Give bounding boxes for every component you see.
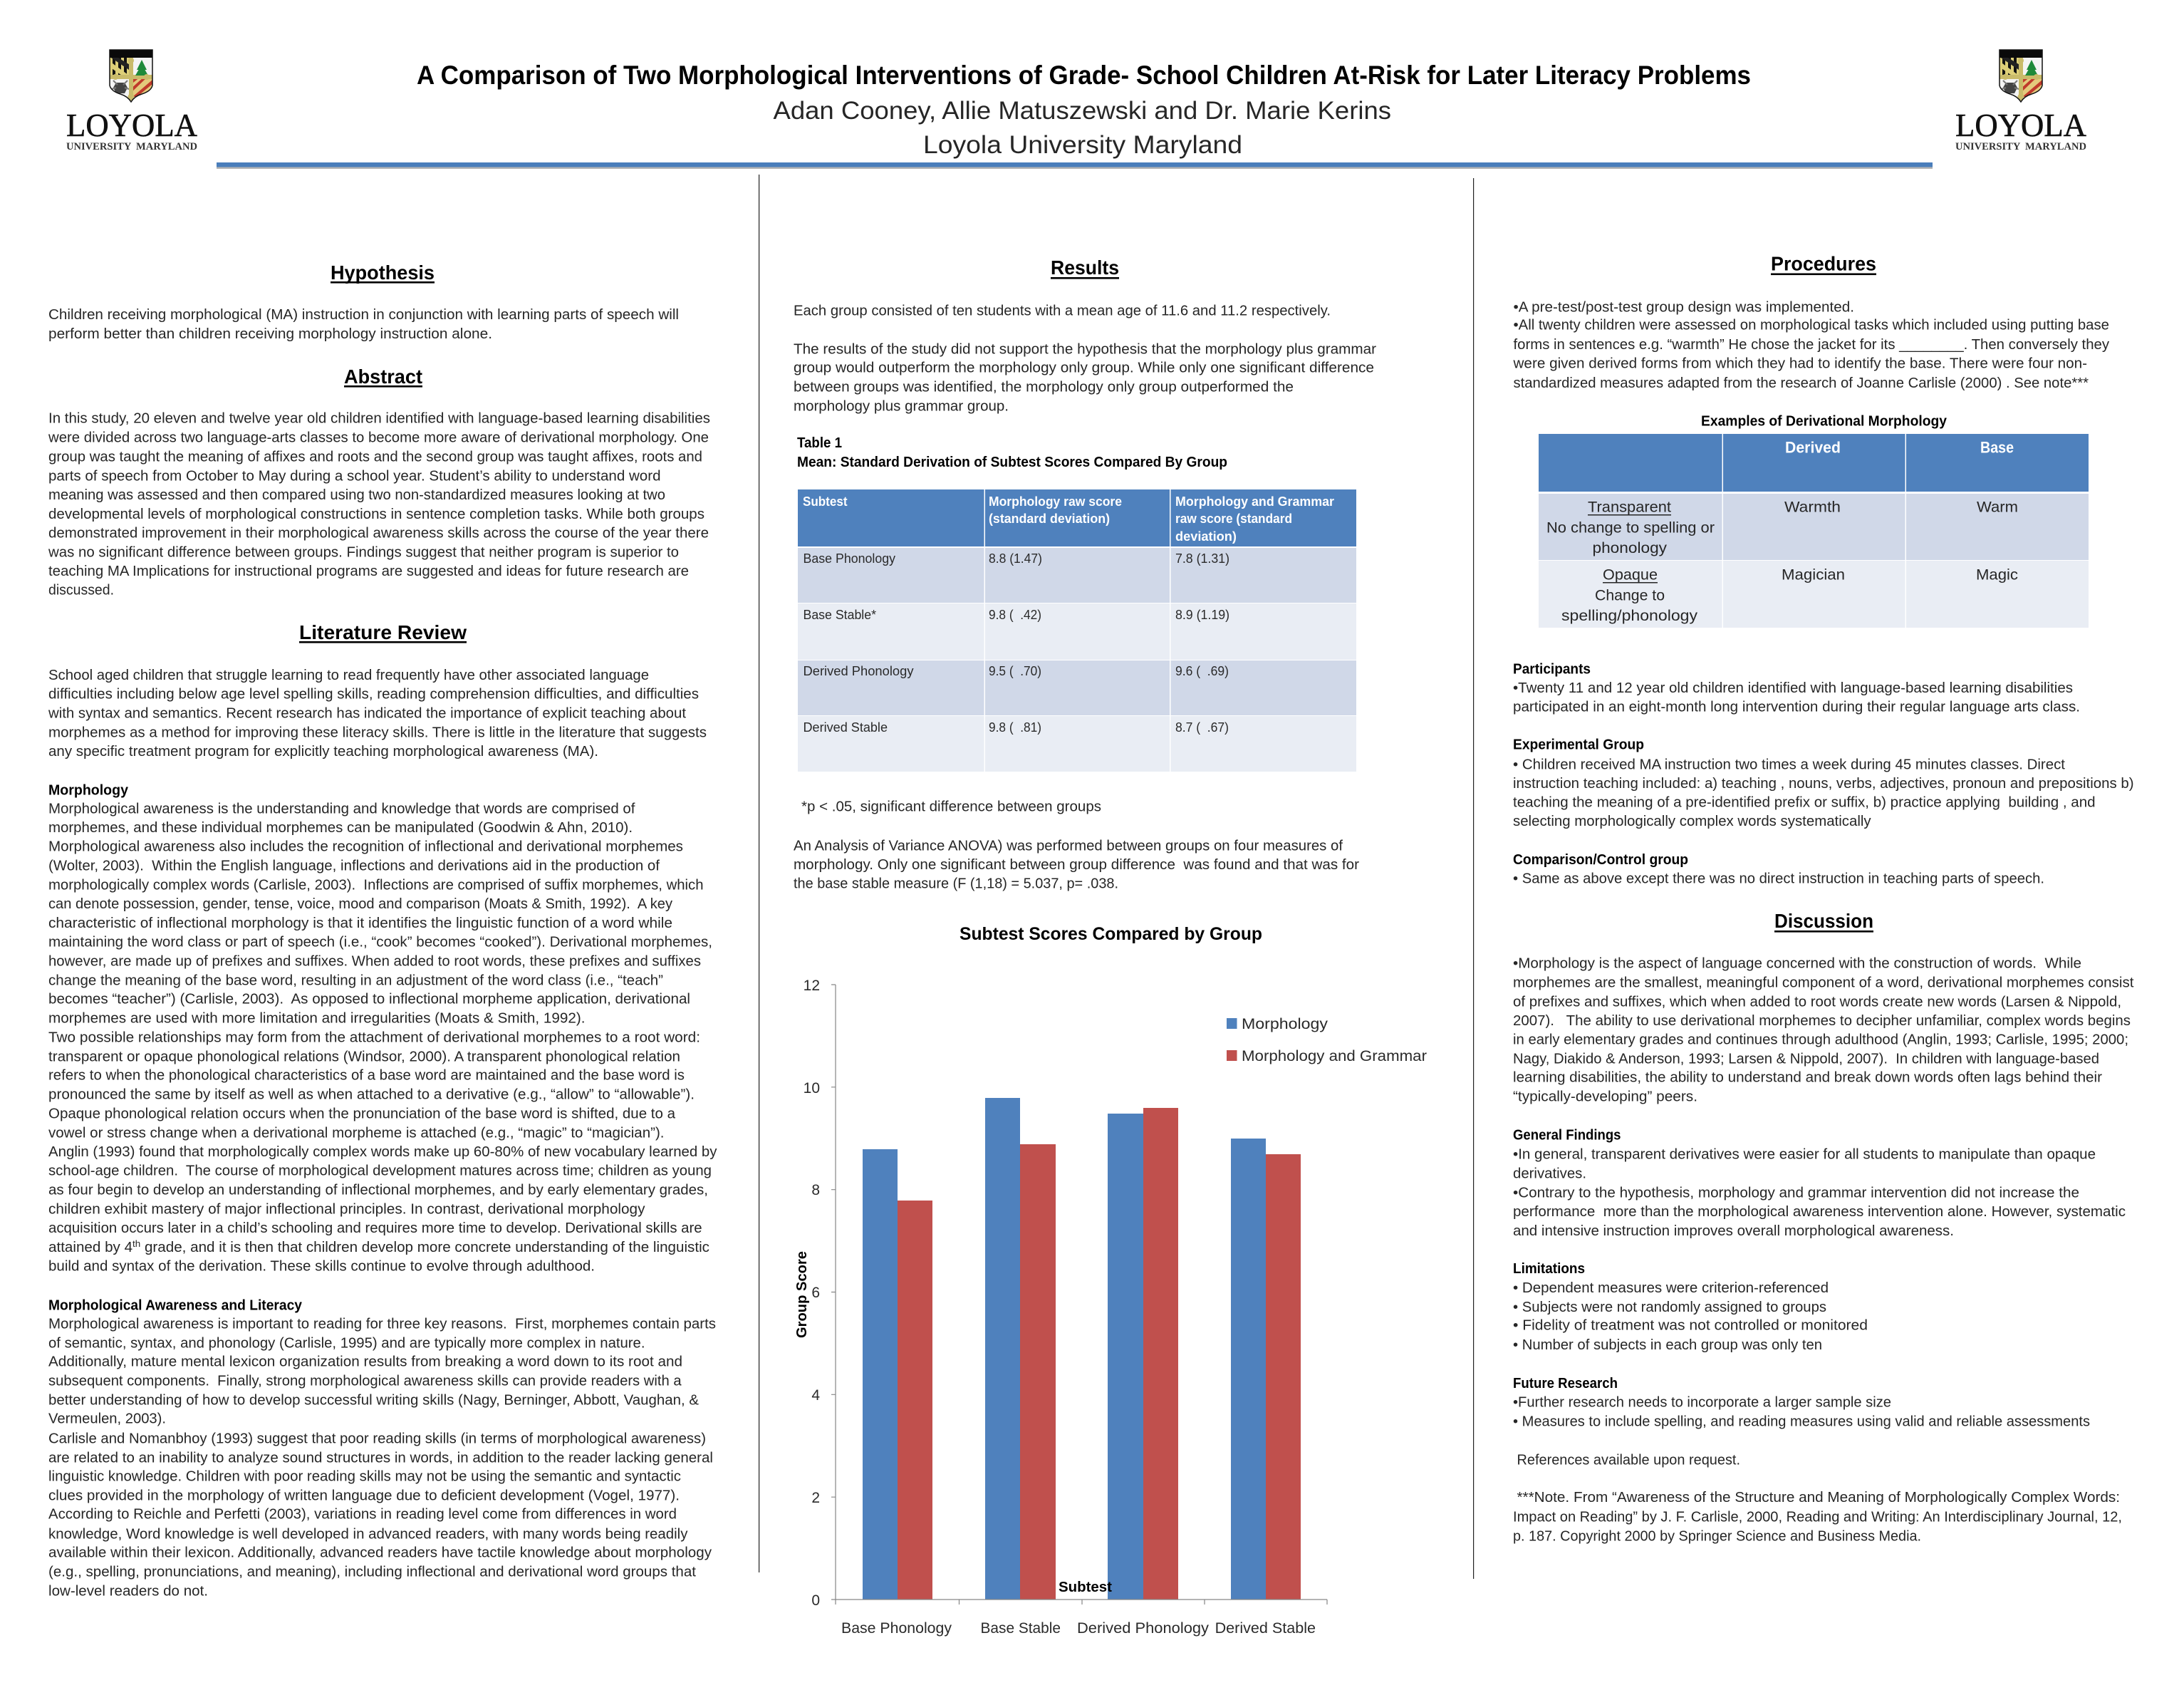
table: subtest scores: Derived Phonology <box>804 664 913 678</box>
table: subtest scores: deviation) <box>1175 529 1237 544</box>
text block: general findings: •Contrary to the hypothesis, morphology and grammar intervention did not increase the <box>1513 1186 2079 1201</box>
legend: Morphology and Grammar <box>1242 1048 1427 1064</box>
text block: morphology: change the meaning of the base word, resulting in an adjustment of the word class (i.e., “teach” <box>48 973 663 989</box>
text block: abstract: were divided across two language-arts classes to become more aware of derivational morphology. One <box>48 430 709 446</box>
text block: abstract: parts of speech from October to May during a school year. Student’s ability to understand word <box>48 469 661 484</box>
text block: morphology: grade, and it is then that children develop more concrete understanding of the linguistic <box>140 1240 709 1255</box>
text block: abstract: was no significant difference between groups. Findings suggest that neither program is superior to <box>48 544 679 560</box>
text block: note: ***Note. From “Awareness of the Structure and Meaning of Morphologically Complex Words: <box>1517 1490 2120 1505</box>
table: subtest scores: 8.8 (1.47) <box>989 551 1042 566</box>
table: subtest scores: 8.7 ( .67) <box>1175 720 1229 735</box>
text block: awareness and literacy: subsequent components. Finally, strong morphological awareness skills can provide readers with a <box>48 1374 682 1389</box>
text block: procedures: •A pre-test/post-test group design was implemented. <box>1513 299 1854 315</box>
table: derivational morphology: Warm <box>1977 499 2018 516</box>
heading: Abstract: Abstract <box>344 366 422 388</box>
text block: morphology: Opaque phonological relation occurs when the pronunciation of the base word is shifted, due to a <box>48 1106 676 1121</box>
footnote: *p < .05, significant difference between groups <box>801 799 1101 815</box>
text block: awareness and literacy: (e.g., spelling, pronunciations, and meaning), including inflectional and derivational word groups that <box>48 1565 696 1580</box>
x axis labels: Base Stable <box>980 1620 1061 1637</box>
y axis labels: 4 <box>811 1387 820 1404</box>
x axis labels: Derived Phonology <box>1077 1620 1210 1637</box>
text block: morphology: morphemes are used with more limitation and irregularities (Moats & Smith, 1992). <box>48 1010 585 1026</box>
text block: experimental group <box>1513 757 2134 829</box>
text block: procedures <box>1512 299 2109 391</box>
text block: awareness and literacy <box>48 1317 716 1599</box>
text block: awareness and literacy: Vermeulen, 2003). <box>48 1411 166 1426</box>
text block: awareness and literacy: Carlisle and Nomanbhoy (1993) suggest that poor reading skills (in terms of morphological awareness) <box>48 1431 706 1446</box>
table: derivational morphology: Base <box>1980 439 2014 456</box>
text block: ANOVA: An Analysis of Variance ANOVA) was performed between groups on four measures of <box>794 838 1343 854</box>
text block: morphology: as four begin to develop an understanding of inflectional morphemes, and by early elementary grades, <box>48 1183 708 1198</box>
text block: results: group would outperform the morphology only group. While only one significant difference <box>794 361 1374 376</box>
table: derivational morphology: No change to spelling or <box>1546 519 1715 536</box>
text block: note: Impact on Reading” by J. F. Carlisle, 2000, Reading and Writing: An Interdisciplinary Journal, 12, <box>1513 1509 2122 1525</box>
table: subtest scores: Base Phonology <box>804 551 895 566</box>
text block: general findings: •In general, transparent derivatives were easier for all students to manipulate than opaque <box>1513 1147 2096 1163</box>
text block: results: morphology plus grammar group. <box>794 399 1009 415</box>
text block: discussion: “typically-developing” peers. <box>1513 1089 1697 1104</box>
text block: general findings: and intensive instruction improves overall morphological awareness. <box>1513 1223 1954 1239</box>
subheading: General Findings: General Findings <box>1513 1127 1621 1143</box>
table caption: derivational morphology: Examples of Derivational Morphology <box>1701 413 1948 429</box>
text block: morphology: morphemes, and these individual morphemes can be manipulated (Goodwin & Ahn, 2010). <box>48 820 633 836</box>
logo: Loyola right <box>1955 50 2086 152</box>
text block: discussion: of prefixes and suffixes, which when added to root words create new words (Larsen & Nippold, <box>1513 995 2121 1010</box>
heading: Results: Results <box>1051 256 1119 279</box>
text block: discussion: learning disabilities, the ability to understand and break down words often lags behind their <box>1513 1070 2102 1086</box>
axes <box>831 985 1327 1605</box>
table: subtest scores: 9.5 ( .70) <box>989 664 1041 678</box>
table: subtest scores: 9.8 ( .81) <box>989 720 1041 735</box>
table: subtest scores: Base Stable* <box>804 608 876 622</box>
text block: awareness and literacy: clues provided in the morphology of written language due to deficient development (Vogel, 1977). <box>48 1488 680 1503</box>
text block: results <box>794 304 1376 415</box>
text block: morphology: becomes “teacher”) (Carlisle, 2003). As opposed to inflectional morpheme application, derivational <box>48 992 690 1007</box>
table: derivational morphology: Transparent <box>1588 499 1671 516</box>
text block: abstract: developmental levels of morphological constructions in sentence completion tasks. While both groups <box>48 507 704 522</box>
text block: future research: •Further research needs to incorporate a larger sample size <box>1513 1395 1891 1411</box>
text block: limitations <box>1513 1280 1868 1353</box>
table caption <box>797 435 1227 470</box>
text block: limitations: • Fidelity of treatment was not controlled or monitored <box>1513 1318 1868 1334</box>
text block: morphology: attained by 4 <box>48 1240 130 1255</box>
logo: Loyola left <box>66 50 197 152</box>
text block: experimental group: instruction teaching included: a) teaching , nouns, verbs, adjectives, pronoun and prepositions b) <box>1513 776 2134 792</box>
text block: morphology: however, are made up of prefixes and suffixes. When added to root words, these prefixes and suffixes <box>48 953 701 969</box>
y axis labels: 2 <box>811 1490 820 1506</box>
heading: Procedures: Procedures <box>1771 252 1876 275</box>
text block: discussion: in early elementary grades and continues through adulthood (Anglin, 1993; Carlisle, 1995; 2000; <box>1513 1032 2128 1047</box>
text block: literature intro <box>48 668 707 760</box>
text block: morphology: (Wolter, 2003). Within the English language, inflections and derivations aid in the production of <box>48 858 660 873</box>
bars: Derived Stable <box>1231 1139 1301 1600</box>
text block: morphology: th <box>132 1238 140 1249</box>
bars: Derived Phonology <box>1108 1108 1178 1600</box>
text block: ANOVA <box>794 838 1359 892</box>
text block: awareness and literacy: Morphological awareness is important to reading for three key reasons. First, morphemes contain parts <box>48 1317 716 1332</box>
table: subtest scores: raw score (standard <box>1175 512 1292 526</box>
text block: awareness and literacy: linguistic knowledge. Children with poor reading skills may not be using the semantic and syntactic <box>48 1469 681 1485</box>
text block: morphology: transparent or opaque phonological relations (Windsor, 2000). A transparent phonological relation <box>48 1049 680 1064</box>
y axis labels: 10 <box>804 1080 820 1097</box>
table: subtest scores: Derived Stable <box>804 720 888 735</box>
text block: morphology: morphologically complex words (Carlisle, 2003). Inflections are comprised of suffix morphemes, which <box>48 878 704 893</box>
text block: awareness and literacy: available within their lexicon. Additionally, advanced readers have tactile knowledge about morphology <box>48 1545 712 1560</box>
legend: Morphology <box>1242 1016 1328 1032</box>
text block: awareness and literacy: According to Reichle and Perfetti (2003), variations in reading level come from differences in word <box>48 1506 677 1522</box>
text block: literature intro: difficulties including below age level spelling skills, reading comprehension difficulties, and difficulties <box>48 687 699 703</box>
text block: morphology: acquisition occurs later in a child’s schooling and requires more time to develop. Derivational skills are <box>48 1220 702 1236</box>
bars: Base Stable <box>985 1098 1056 1600</box>
text block: morphology: Morphological awareness is the understanding and knowledge that words are comprised of <box>48 801 635 817</box>
text block: morphology: Two possible relationships may form from the attachment of derivational morphemes to a root word: <box>48 1030 700 1046</box>
y axis labels: 6 <box>811 1285 820 1301</box>
table: subtest scores: Morphology and Grammar <box>1175 494 1334 509</box>
text block: morphology <box>48 801 717 1274</box>
panel: middle column <box>794 256 1427 1637</box>
text block: abstract: teaching MA Implications for instructional programs are suggested and ideas for future research are <box>48 564 689 579</box>
table caption: Mean: Standard Derivation of Subtest Scores Compared By Group <box>797 455 1227 470</box>
table: derivational morphology: Magic <box>1976 566 2018 583</box>
x axis labels: Derived Stable <box>1215 1620 1316 1637</box>
text block: future research <box>1513 1395 2090 1429</box>
text block: note: p. 187. Copyright 2000 by Springer Science and Business Media. <box>1513 1529 1921 1545</box>
text block: ANOVA: the base stable measure (F (1,18) = 5.037, p= .038. <box>794 876 1118 892</box>
subheading: Morphology: Morphology <box>48 782 129 798</box>
text block: discussion: 2007). The ability to use derivational morphemes to decipher unfamiliar, complex words begins <box>1513 1013 2131 1029</box>
text block: limitations: • Number of subjects in each group was only ten <box>1513 1337 1822 1353</box>
text block: abstract: demonstrated improvement in their morphological awareness skills across the course of the year there <box>48 526 709 541</box>
text block: experimental group: teaching the meaning of a pre-identified prefix or suffix, b) practice applying building , and <box>1513 795 2096 811</box>
text block: literature intro: with syntax and semantics. Recent research has indicated the importance of explicit teaching about <box>48 705 686 721</box>
text block: ANOVA: morphology. Only one significant between group difference was found and that was for <box>794 857 1359 873</box>
table: derivational morphology: Derived <box>1785 439 1841 456</box>
text block: procedures: •All twenty children were assessed on morphological tasks which included using putting base <box>1513 318 2109 333</box>
table caption: Table 1 <box>797 435 842 451</box>
text block: morphology: school-age children. The course of morphological development matures across time; children as young <box>48 1163 712 1178</box>
panel: right column <box>1512 252 2134 1545</box>
text block: results: between groups was identified, the morphology only group outperformed the <box>794 379 1294 395</box>
text block: morphology: vowel or stress change when a derivational morpheme is attached (e.g., “magic” to “magician”). <box>48 1126 664 1141</box>
x axis labels: Base Phonology <box>841 1620 952 1637</box>
text block: awareness and literacy: of semantic, syntax, and phonology (Carlisle, 1995) and are typically more complex in nature. <box>48 1335 645 1351</box>
text block: morphology: refers to when the phonological characteristics of a base word are maintained and the base word is <box>48 1067 685 1083</box>
text block: hypothesis: perform better than children receiving morphology instruction alone. <box>48 326 492 342</box>
legend <box>1227 1016 1427 1064</box>
logo subtitle right: UNIVERSITY MARYLAND <box>1955 141 2086 152</box>
logo wordmark left: LOYOLA <box>66 107 197 143</box>
text block: general findings <box>1513 1147 2126 1239</box>
subheading: Participants: Participants <box>1513 661 1591 677</box>
table: derivational morphology: Change to <box>1595 587 1665 604</box>
y axis title: Group Score <box>794 1251 810 1338</box>
table: subtest scores: 7.8 (1.31) <box>1175 551 1229 566</box>
text block: literature intro: School aged children that struggle learning to read frequently have other associated language <box>48 668 649 683</box>
text block: morphology: pronounced the same by itself as well as when attached to a derivative (e.g., “allow” to “allowable”). <box>48 1087 695 1103</box>
text block: experimental group: selecting morphologically complex words systematically <box>1513 814 1871 829</box>
text block: discussion: •Morphology is the aspect of language concerned with the construction of words. While <box>1513 956 2081 972</box>
subheading: Comparison/Control group: Comparison/Control group <box>1513 852 1688 868</box>
text block: participants: •Twenty 11 and 12 year old children identified with language-based learning disabilities <box>1513 680 2073 696</box>
table: derivational morphology <box>1539 434 2089 628</box>
text block: limitations: • Subjects were not randomly assigned to groups <box>1513 1300 1826 1315</box>
y axis labels: 8 <box>811 1182 820 1198</box>
text block: hypothesis: Children receiving morphological (MA) instruction in conjunction with learning parts of speech will <box>48 307 679 323</box>
subheading: Future Research: Future Research <box>1513 1376 1618 1391</box>
table: subtest scores: 9.8 ( .42) <box>989 608 1041 622</box>
text block: abstract: meaning was assessed and then compared using two non-standardized measures looking at two <box>48 487 665 503</box>
panel: left column <box>48 261 717 1599</box>
text block: results: Each group consisted of ten students with a mean age of 11.6 and 11.2 respectively. <box>794 304 1331 319</box>
text block: procedures: standardized measures adapted from the research of Joanne Carlisle (2000) . See note*** <box>1513 375 2089 391</box>
text block: general findings: performance more than the morphological awareness intervention alone. However, systematic <box>1513 1204 2126 1220</box>
text block: hypothesis <box>48 307 679 342</box>
y axis labels: 0 <box>811 1592 820 1609</box>
text block: discussion: Nagy, Diakido & Anderson, 1993; Larsen & Nippold, 2007). In children with language-based <box>1513 1052 2099 1067</box>
text block: awareness and literacy: low-level readers do not. <box>48 1583 208 1599</box>
text block: awareness and literacy: are related to an inability to analyze sound structures in words, in addition to the reader lacking general <box>48 1451 713 1466</box>
table: subtest scores: Morphology raw score <box>989 494 1122 509</box>
text block: general findings: derivatives. <box>1513 1166 1586 1181</box>
icon: crest right <box>2000 50 2042 102</box>
text block: morphology: children exhibit mastery of major inflectional principles. In contrast, derivational morphology <box>48 1201 645 1217</box>
text block: note <box>1513 1490 2122 1545</box>
text block: abstract: discussed. <box>48 583 114 598</box>
y axis labels: 12 <box>804 978 820 994</box>
text block: awareness and literacy: better understanding of how to develop successful writing skills (Nagy, Berninger, Abbott, Vaughan, & <box>48 1392 700 1408</box>
text block: awareness and literacy: knowledge, Word knowledge is well developed in advanced readers, with many words being readily <box>48 1526 687 1542</box>
text block: literature intro: morphemes as a method for improving these literacy skills. There is little in the literature that suggests <box>48 725 707 741</box>
text block: abstract: In this study, 20 eleven and twelve year old children identified with language-based learning disabilities <box>48 410 710 426</box>
icon: crest left <box>110 50 152 102</box>
table: subtest scores <box>798 489 1356 772</box>
text block: morphology: maintaining the word class or part of speech (i.e., “cook” becomes “cooked”). Derivational morphemes, <box>48 935 712 950</box>
institution: Loyola University Maryland <box>923 131 1242 159</box>
table: derivational morphology: phonology <box>1593 539 1667 556</box>
logo wordmark right: LOYOLA <box>1955 107 2086 143</box>
text block: limitations: • Dependent measures were criterion-referenced <box>1513 1280 1829 1296</box>
text block: literature intro: any specific treatment program for explicitly teaching morphological awareness (MA). <box>48 744 598 760</box>
heading: Discussion: Discussion <box>1774 910 1873 932</box>
text block: morphology: can denote possession, gender, tense, voice, mood and comparison (Moats & Smith, 1992). A key <box>48 896 672 912</box>
bar chart: subtest scores <box>794 924 1427 1637</box>
chart title: Subtest Scores Compared by Group <box>960 924 1262 944</box>
logo subtitle left: UNIVERSITY MARYLAND <box>66 141 197 152</box>
text block: abstract <box>48 410 710 598</box>
x axis title: Subtest <box>1059 1580 1112 1595</box>
subheading: Experimental Group: Experimental Group <box>1513 737 1644 752</box>
text block: participants <box>1513 680 2080 715</box>
table: subtest scores: Subtest <box>803 494 848 509</box>
text block: participants: participated in an eight-month long intervention during their regular language arts class. <box>1513 700 2080 715</box>
x axis labels <box>841 1620 1316 1637</box>
subheading: Limitations: Limitations <box>1513 1261 1585 1277</box>
text block: morphology: build and syntax of the derivation. These skills continue to evolve through adulthood. <box>48 1258 595 1274</box>
table: subtest scores: (standard deviation) <box>989 512 1110 526</box>
text block: morphology: Anglin (1993) found that morphologically complex words make up 60-80% of new vocabulary learned by <box>48 1144 717 1160</box>
text block: references: References available upon request. <box>1517 1452 1740 1468</box>
text block: procedures: forms in sentences e.g. “warmth” He chose the jacket for its ________. Then conversely they <box>1513 337 2109 353</box>
text block: morphology: Morphological awareness also includes the recognition of inflectional and derivational morphemes <box>48 839 683 855</box>
text block: experimental group: • Children received MA instruction two times a week during 45 minutes classes. Direct <box>1513 757 2065 772</box>
table: derivational morphology: Magician <box>1782 566 1845 583</box>
y axis labels <box>804 978 820 1609</box>
table: subtest scores: 9.6 ( .69) <box>1175 664 1229 678</box>
text block: morphology: characteristic of inflectional morphology is that it identifies the linguistic function of a word while <box>48 916 672 931</box>
text block: abstract: group was taught the meaning of affixes and roots and the second group was taught affixes, roots and <box>48 449 702 465</box>
heading: Hypothesis: Hypothesis <box>331 261 435 284</box>
title block <box>417 61 1751 159</box>
table: subtest scores: 8.9 (1.19) <box>1175 608 1229 622</box>
title: A Comparison of Two Morphological Interventions of Grade- School Children At-Risk for Later Literacy Problems <box>417 61 1751 90</box>
table: derivational morphology: Opaque <box>1603 566 1658 583</box>
bars: Base Phonology <box>863 1149 932 1600</box>
text block: comparison group: • Same as above except there was no direct instruction in teaching parts of speech. <box>1513 871 2044 886</box>
text block: discussion: morphemes are the smallest, meaningful component of a word, derivational morphemes consist <box>1513 975 2134 990</box>
text block: future research: • Measures to include spelling, and reading measures using valid and reliable assessments <box>1513 1414 2090 1429</box>
subheading: Morphological Awareness and Literacy: Morphological Awareness and Literacy <box>48 1298 303 1314</box>
table: derivational morphology: Warmth <box>1784 499 1841 516</box>
text block: procedures: were given derived forms from which they had to identify the base. There were four non- <box>1512 356 2087 372</box>
text block: awareness and literacy: Additionally, mature mental lexicon organization results from breaking a word down to its root and <box>48 1354 682 1369</box>
heading: Literature Review: Literature Review <box>299 621 467 643</box>
text block: discussion <box>1513 956 2134 1104</box>
authors: Adan Cooney, Allie Matuszewski and Dr. Marie Kerins <box>774 97 1391 125</box>
text block: results: The results of the study did not support the hypothesis that the morphology plus grammar <box>794 342 1376 358</box>
table: derivational morphology: spelling/phonology <box>1561 607 1697 624</box>
